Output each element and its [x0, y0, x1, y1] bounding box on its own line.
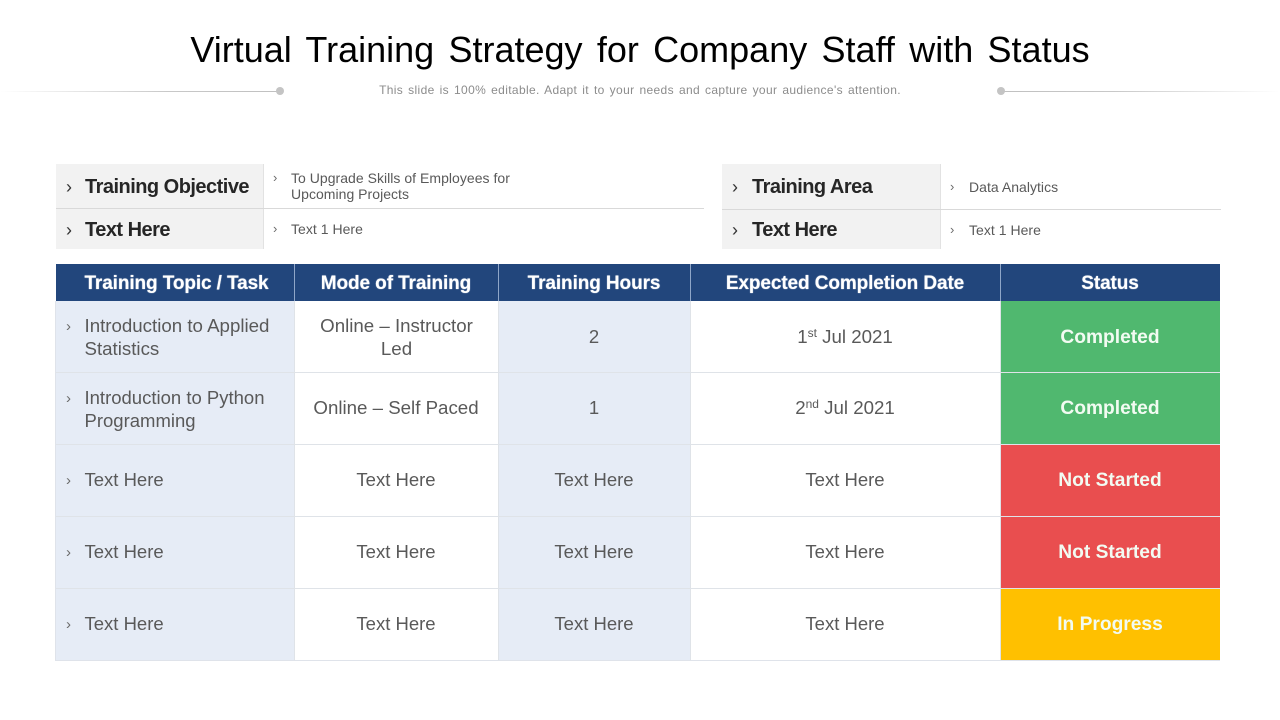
second value: › [273, 221, 277, 236]
status: not started row 4 [1000, 517, 1220, 589]
subtitle: This slide is 100% editable. Adapt it to your needs and capture your audience's attention. [379, 83, 901, 97]
row 5: topic: Text Here [84, 613, 164, 634]
panel: training objective summary: Text Here [85, 219, 170, 241]
status: not started row 3 [1000, 445, 1220, 517]
area label [732, 176, 873, 198]
area value: Data Analytics [969, 179, 1058, 195]
row 3: status: Not Started [1058, 470, 1162, 491]
row 5: mode: Text Here [356, 613, 436, 634]
header row [56, 264, 1220, 301]
row 4: mode: Text Here [356, 541, 436, 562]
panel: training area summary: › [732, 220, 737, 240]
right header rule with dot [997, 87, 1254, 95]
row 1: mode: Led [381, 338, 412, 359]
row 1: topic [66, 315, 269, 359]
objective value: To Upgrade Skills of Employees for [291, 170, 510, 186]
column shading [56, 301, 294, 661]
heading: training topic: Training Topic / Task [84, 273, 269, 294]
row 2: topic: Programming [84, 410, 196, 431]
row 1: mode [320, 315, 473, 359]
second label [732, 219, 837, 241]
row 2: topic: › [66, 390, 71, 407]
row 5: status: In Progress [1057, 614, 1163, 635]
panel: training area summary: › [732, 177, 737, 197]
heading: status: Status [1081, 273, 1139, 294]
row 2: status: Completed [1060, 398, 1160, 419]
status: completed row 1 [1000, 301, 1220, 373]
row 1: hours: 2 [589, 326, 599, 347]
panel: training area summary: Text Here [752, 219, 837, 241]
row 2: date: 2nd Jul 2021 [795, 397, 895, 418]
row 2: topic: Introduction to Python [84, 387, 264, 408]
heading: hours: Training Hours [528, 273, 660, 294]
row 3: date: Text Here [805, 469, 885, 490]
row 4: topic: › [66, 544, 71, 561]
objective value: Upcoming Projects [291, 186, 409, 202]
grid lines [55, 301, 1220, 661]
row 4: hours: Text Here [554, 541, 634, 562]
objective label [66, 176, 249, 198]
panel: training objective summary: Training Objective [85, 176, 249, 198]
objective value [273, 170, 510, 202]
objective value: › [273, 170, 277, 185]
second value: › [950, 222, 954, 237]
row 1: mode: Online – Instructor [320, 315, 473, 336]
second value: Text 1 Here [291, 221, 363, 237]
second value: Text 1 Here [969, 222, 1041, 238]
panel: training area summary [722, 164, 1221, 249]
row 1: status: Completed [1060, 327, 1160, 348]
row 4: status: Not Started [1058, 542, 1162, 563]
panel: training area summary: Training Area [752, 176, 872, 198]
left header rule with dot [25, 87, 284, 95]
row 3: topic: Text Here [84, 469, 164, 490]
row 1: topic: › [66, 318, 71, 335]
row 5: topic: › [66, 616, 71, 633]
row 3: mode: Text Here [356, 469, 436, 490]
row 5: date: Text Here [805, 613, 885, 634]
row 5: hours: Text Here [554, 613, 634, 634]
heading: mode: Mode of Training [321, 273, 471, 294]
panel: training objective summary: › [66, 177, 71, 197]
row 1: topic: Introduction to Applied [84, 315, 269, 336]
title: Virtual Training Strategy for Company Staff with Status [190, 29, 1090, 70]
row 3: hours: Text Here [554, 469, 634, 490]
row 3: topic: › [66, 472, 71, 489]
panel: training objective summary [56, 164, 704, 249]
row 2: hours: 1 [589, 397, 599, 418]
row 1: topic: Statistics [84, 338, 159, 359]
status: completed row 2 [1000, 373, 1220, 445]
row 4: topic: Text Here [84, 541, 164, 562]
panel: training objective summary: › [66, 220, 71, 240]
row 4: date: Text Here [805, 541, 885, 562]
row 2: mode: Online – Self Paced [313, 397, 479, 418]
row 2: topic [66, 387, 264, 431]
second label [66, 219, 170, 241]
area value: › [950, 179, 954, 194]
status: in progress row 5 [1000, 589, 1220, 661]
heading: date: Expected Completion Date [726, 273, 964, 294]
row 1: date: 1st Jul 2021 [797, 326, 893, 347]
